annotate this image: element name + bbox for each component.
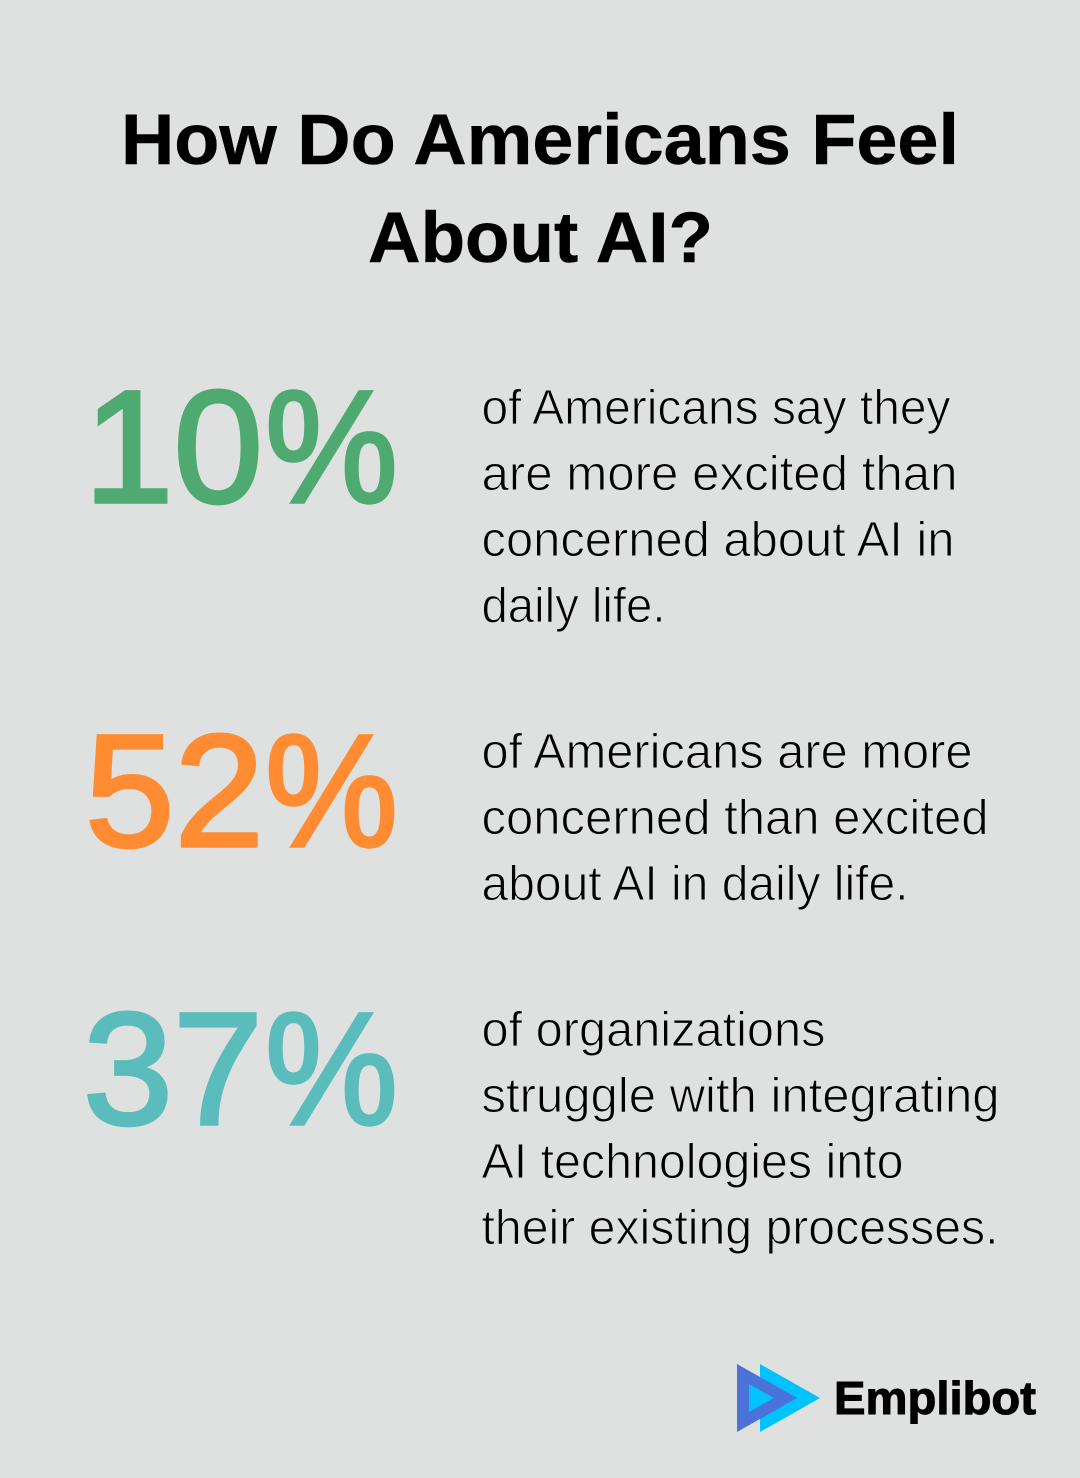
title — [121, 101, 959, 278]
text: 37% description: their existing processes. — [482, 1201, 998, 1255]
text: 10% description — [482, 381, 958, 633]
number: 10%: 10 — [84, 357, 263, 536]
logo: Emplibot — [737, 1364, 1036, 1432]
text: 37% description: AI technologies into — [482, 1135, 904, 1189]
panel: 10% statistic — [84, 357, 958, 633]
panel: 52% statistic — [85, 701, 988, 911]
number: 10% — [84, 357, 398, 536]
number: 52%: 52 — [85, 701, 264, 880]
text: 37% description: of organizations — [482, 1003, 826, 1057]
text: 37% description — [482, 1003, 1000, 1255]
text: 10% description: concerned about AI in — [482, 513, 954, 567]
text: 10% description: are more excited than — [482, 447, 958, 501]
text: 10% description: daily life. — [482, 579, 666, 633]
text: 52% description: about AI in daily life. — [482, 857, 908, 911]
title: How Do Americans Feel — [121, 101, 959, 180]
number: 37%: % — [265, 979, 398, 1158]
text: 52% description — [482, 725, 988, 911]
number: 52%: % — [265, 701, 398, 880]
number: 37% — [83, 979, 398, 1158]
number: 10%: % — [265, 357, 398, 536]
wordmark: Emplibot — [834, 1372, 1036, 1424]
text: 52% description: of Americans are more — [482, 725, 972, 779]
title: About AI? — [368, 199, 713, 278]
text: 37% description: struggle with integrating — [482, 1069, 1000, 1123]
number: 37%: 37 — [83, 979, 263, 1158]
text: 52% description: concerned than excited — [482, 791, 988, 845]
panel: 37% statistic — [83, 979, 1000, 1255]
number: 52% — [85, 701, 398, 880]
text: 10% description: of Americans say they — [482, 381, 951, 435]
icon: play triangles — [737, 1364, 820, 1432]
